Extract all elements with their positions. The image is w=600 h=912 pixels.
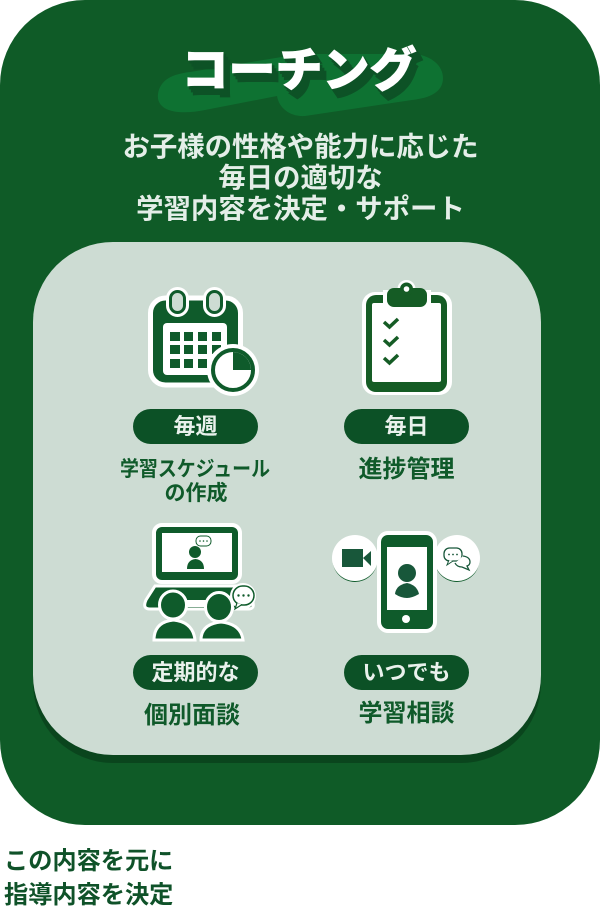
icon: calendar with clock [150, 288, 259, 396]
title: coaching with brush stroke: コーチング [188, 40, 422, 109]
title: coaching with brush stroke: コーチング [184, 34, 418, 103]
icon: clipboard with checks [362, 280, 452, 395]
footer text block: この内容を元に [4, 848, 173, 875]
label: create learning schedule: の作成 [164, 481, 228, 505]
icon: smartphone with video and chat [332, 533, 480, 631]
panel: inner light panel with shadow [33, 242, 541, 763]
label: create learning schedule: 学習スケジュール [120, 458, 270, 481]
label: learning consultation: 学習相談 [358, 700, 454, 727]
subtitle text block [122, 131, 479, 224]
label: create learning schedule [120, 458, 270, 505]
pill: anytime [344, 655, 469, 690]
pill: regular [133, 655, 258, 690]
subtitle text block: お子様の性格や能力に応じた [122, 131, 479, 162]
title: coaching with brush stroke [158, 32, 443, 116]
pill: daily: 毎日 [384, 414, 429, 439]
title: coaching with brush stroke: コーチング [186, 37, 420, 106]
pill: daily [344, 409, 469, 444]
footer text block: 指導内容を決定 [4, 882, 173, 909]
pill: weekly: 毎週 [173, 414, 218, 439]
subtitle text block: 毎日の適切な [218, 162, 383, 193]
pill: anytime: いつでも [362, 660, 451, 685]
pill: weekly [133, 409, 258, 444]
icon: online meeting [145, 525, 256, 640]
title: coaching with brush stroke: コーチング [182, 32, 416, 100]
subtitle text block: 学習内容を決定・サポート [136, 193, 465, 224]
label: progress management: 進捗管理 [358, 456, 454, 483]
footer text block [4, 848, 173, 909]
label: individual meeting: 個別面談 [144, 702, 240, 729]
pill: regular: 定期的な [151, 660, 240, 685]
